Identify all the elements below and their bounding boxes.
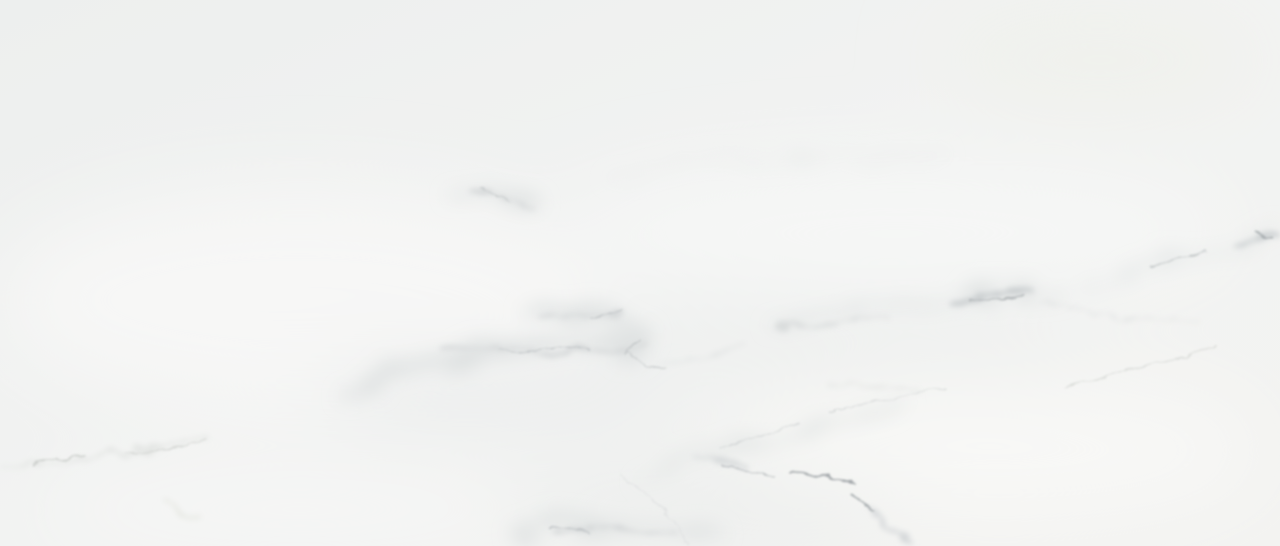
thin broken veins [32, 188, 1272, 545]
medium veins [0, 191, 1280, 543]
wide soft vein haze [345, 155, 1280, 540]
